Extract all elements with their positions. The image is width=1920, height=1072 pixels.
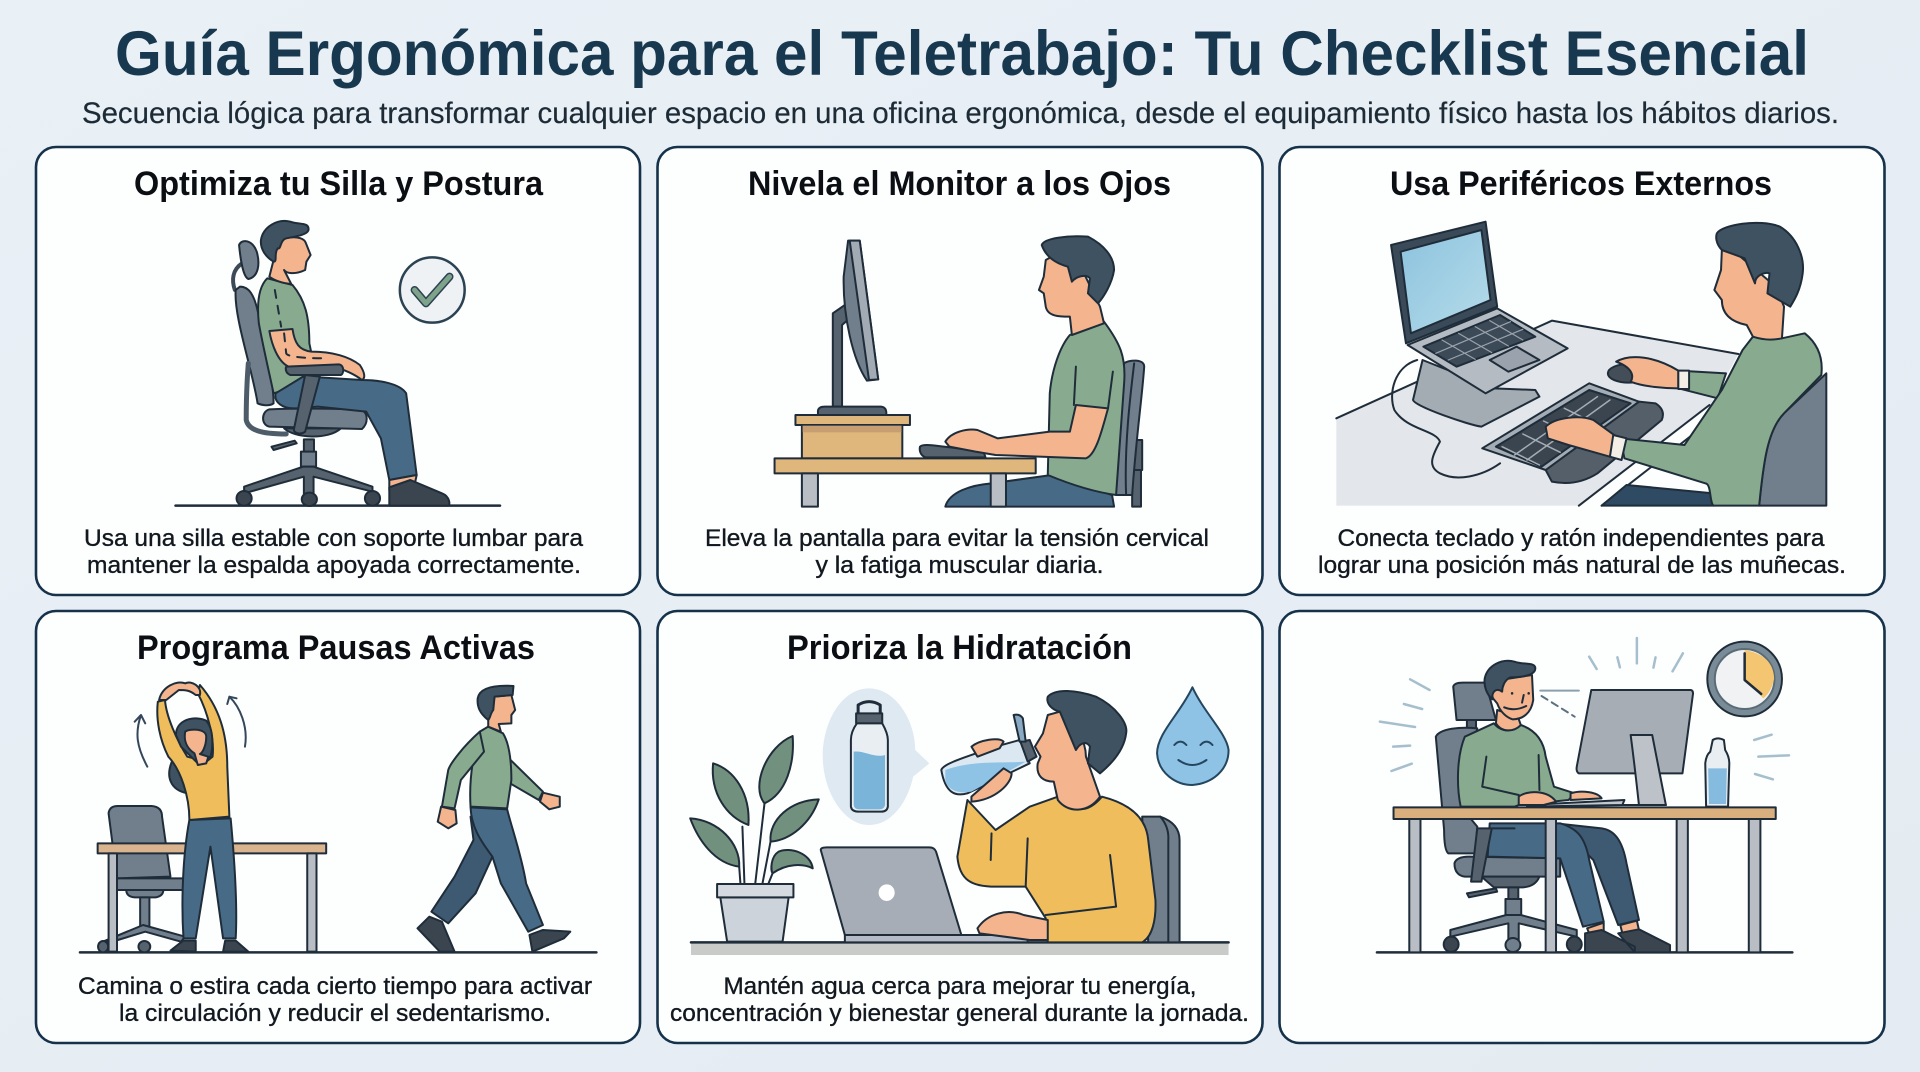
illustration: happy worker at ergonomic desk [1377,638,1792,952]
plant [690,736,819,942]
wall clock [1707,642,1782,716]
heading: periféricos: Usa Periféricos Externos [1390,165,1772,203]
body text: hidratación: Mantén agua cerca para mejorar tu energía, [724,973,1196,1000]
heading: silla: Optimiza tu Silla y Postura [134,165,544,203]
panel: pausas activas [36,611,640,1043]
worker torso and head [1458,661,1575,807]
illustration: stretching and walking figures [80,682,596,952]
title: Guía Ergonómica para el Teletrabajo: Tu Checklist Esencial [115,19,1809,89]
water bottle [1705,738,1729,807]
drinking bottle [941,715,1037,802]
body text: hidratación [670,973,1249,1027]
body text: pausas [78,973,592,1027]
body text: pausas: Camina o estira cada cierto tiempo para activar [78,973,592,1000]
monitor [1577,690,1693,805]
laptop [1391,222,1568,393]
body text: silla [84,525,583,579]
panel: hidratación [658,611,1262,1043]
illustration: person seated on ergonomic chair [176,221,500,506]
panel: silla y postura [36,147,640,595]
body text: silla: mantener la espalda apoyada correctamente. [87,552,581,579]
panel: monitor [658,147,1262,595]
body text: monitor: Eleva la pantalla para evitar la tensión cervical [705,525,1209,552]
panel: periféricos [1280,147,1884,595]
bubble with bottle [823,688,929,825]
icon: check mark [400,257,465,323]
body text: pausas: la circulación y reducir el sedentarismo. [119,1000,551,1027]
laptop [821,847,1028,942]
body text: hidratación: concentración y bienestar general durante la jornada. [670,1000,1249,1027]
desk [1394,807,1776,952]
body text: periféricos: lograr una posición más natural de las muñecas. [1318,552,1846,579]
body text: silla: Usa una silla estable con soporte lumbar para [84,525,583,552]
chair and desk [98,806,326,952]
illustration: laptop stand, keyboard and mouse [1336,222,1826,506]
body text: monitor [705,525,1209,579]
heading: pausas: Programa Pausas Activas [137,629,535,667]
stretching woman [135,682,248,952]
heading: monitor: Nivela el Monitor a los Ojos [748,165,1171,203]
illustration: person with raised monitor [775,236,1144,507]
external keyboard [1482,383,1663,483]
panel: workspace summary [1280,611,1884,1043]
body text: periféricos [1318,525,1846,579]
heading: hidratación: Prioriza la Hidratación [787,629,1132,667]
smiling water drop [1157,687,1229,785]
body text: periféricos: Conecta teclado y ratón independientes para [1338,525,1825,552]
illustration: person drinking water [690,687,1229,955]
chair [1436,683,1582,952]
body text: monitor: y la fatiga muscular diaria. [816,552,1104,579]
walking man [418,686,570,952]
subtitle: Secuencia lógica para transformar cualquier espacio en una oficina ergonómica, desde el equipamiento físico hasta los hábitos diarios. [82,97,1839,130]
